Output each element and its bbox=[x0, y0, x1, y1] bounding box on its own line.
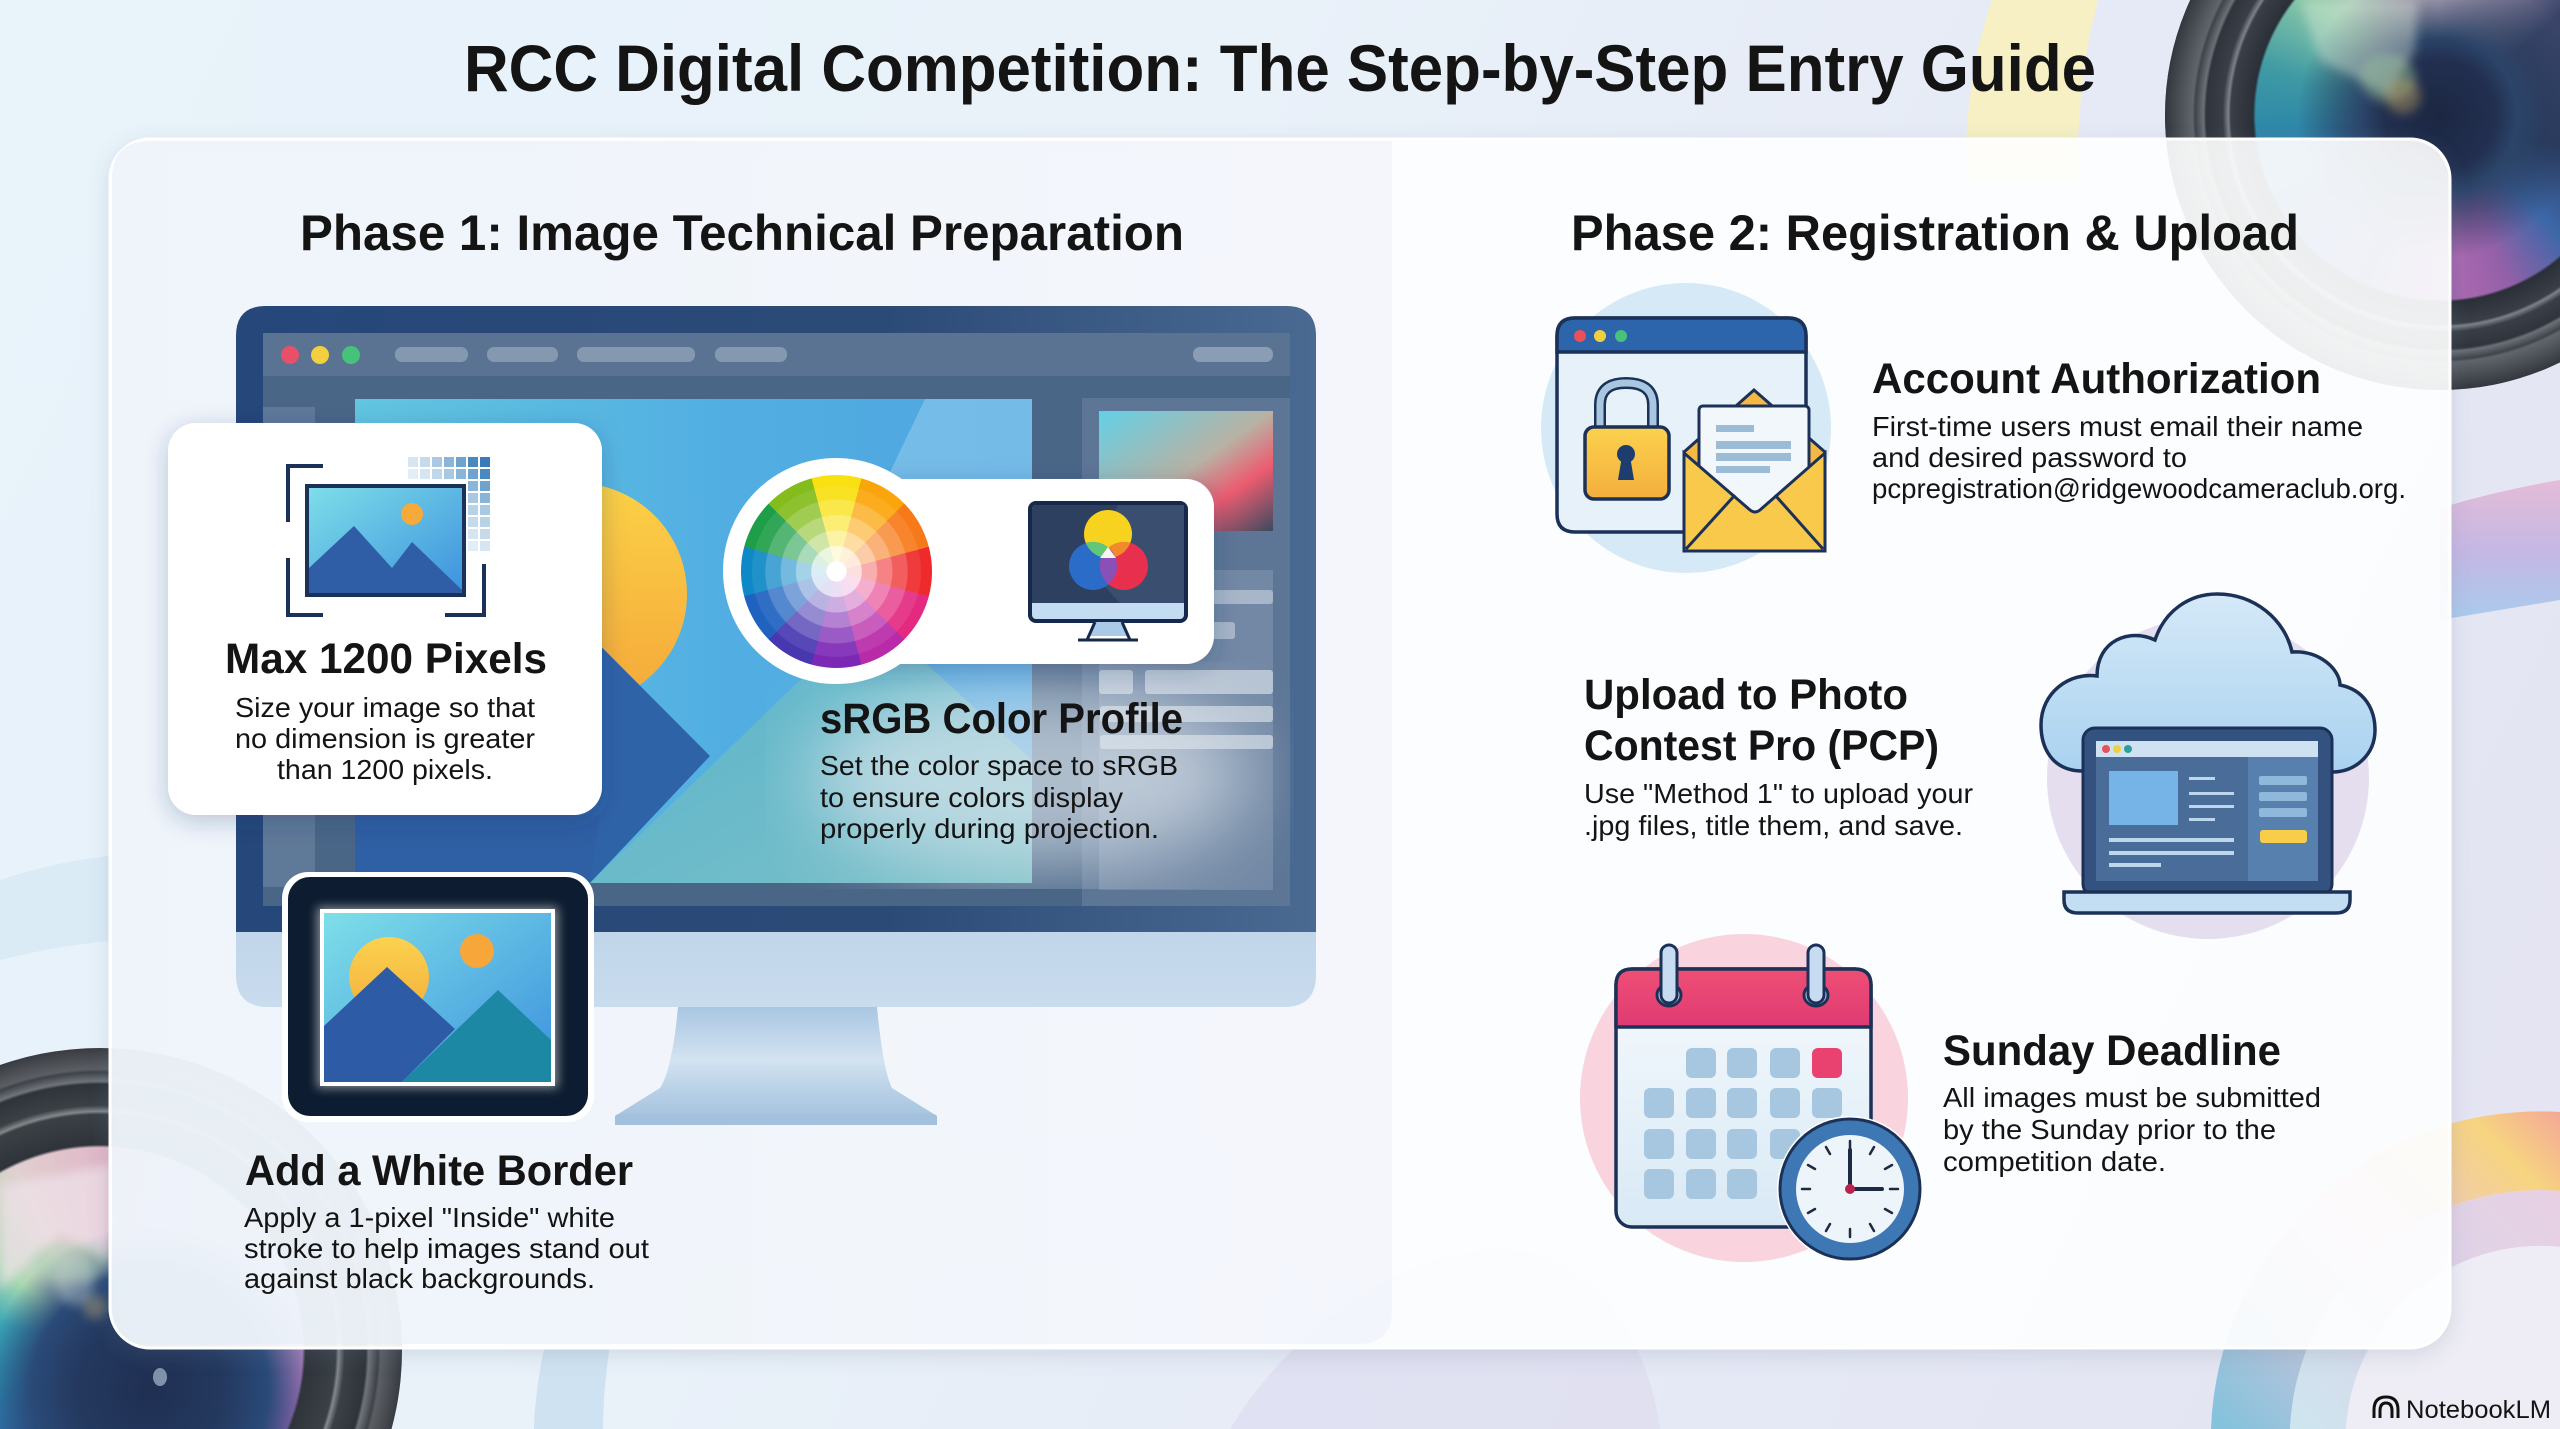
account authorization text block: Account Authorization bbox=[1872, 355, 2321, 403]
card: max 1200 pixels bbox=[168, 423, 602, 815]
icon: account lock and envelope bbox=[1541, 283, 1831, 573]
account authorization text block: pcpregistration@ridgewoodcameraclub.org. bbox=[1872, 473, 2406, 504]
add a white border text block: stroke to help images stand out bbox=[244, 1233, 649, 1264]
upload text block: .jpg files, title them, and save. bbox=[1584, 810, 1963, 841]
phase 2 heading: Phase 2: Registration & Upload bbox=[1571, 205, 2299, 261]
heading: Max 1200 Pixels bbox=[225, 635, 547, 683]
add a white border text block: Add a White Border bbox=[245, 1147, 633, 1195]
sRGB text block: sRGB Color Profile bbox=[820, 695, 1183, 743]
account authorization text block: and desired password to bbox=[1872, 442, 2187, 473]
icon: calendar and clock bbox=[1580, 934, 1923, 1262]
body text: no dimension is greater bbox=[235, 723, 535, 754]
upload text block: Use "Method 1" to upload your bbox=[1584, 778, 1973, 809]
upload text block: Contest Pro (PCP) bbox=[1584, 722, 1939, 770]
body text: Size your image so that bbox=[235, 692, 535, 723]
sRGB text block bbox=[820, 695, 1183, 844]
icon: RGB monitor bbox=[1030, 503, 1186, 640]
add a white border text block: Apply a 1-pixel "Inside" white bbox=[244, 1202, 615, 1233]
color wheel card bbox=[723, 458, 1214, 684]
sRGB text block: properly during projection. bbox=[820, 813, 1159, 844]
add a white border text block bbox=[244, 1147, 649, 1294]
monitor illustration bbox=[236, 306, 1316, 1125]
sunday deadline text block: Sunday Deadline bbox=[1943, 1027, 2281, 1075]
body text: than 1200 pixels. bbox=[277, 754, 493, 785]
title: RCC Digital Competition: The Step-by-Step Entry Guide bbox=[464, 31, 2096, 105]
sunday deadline text block bbox=[1943, 1027, 2321, 1177]
account authorization text block bbox=[1872, 355, 2406, 504]
sunday deadline text block: competition date. bbox=[1943, 1146, 2166, 1177]
icon: framed image with white border bbox=[282, 872, 594, 1122]
account authorization text block: First-time users must email their name bbox=[1872, 411, 2363, 442]
panel: phase 1 image technical preparation bbox=[112, 141, 1392, 1344]
upload text block: Upload to Photo bbox=[1584, 671, 1908, 719]
phase 1 heading: Phase 1: Image Technical Preparation bbox=[300, 205, 1184, 261]
sunday deadline text block: by the Sunday prior to the bbox=[1943, 1114, 2276, 1145]
NotebookLM watermark: NotebookLM bbox=[2406, 1396, 2551, 1424]
icon: cloud and laptop bbox=[2041, 594, 2375, 939]
icon: resize image bbox=[288, 457, 490, 615]
body text bbox=[235, 692, 535, 785]
sRGB text block: to ensure colors display bbox=[820, 782, 1123, 813]
main panel bbox=[110, 139, 2450, 1348]
upload text block bbox=[1584, 671, 1973, 841]
panel: phase 2 registration and upload bbox=[1541, 205, 2406, 1262]
add a white border text block: against black backgrounds. bbox=[244, 1263, 595, 1294]
sRGB text block: Set the color space to sRGB bbox=[820, 750, 1178, 781]
icon: color wheel bbox=[741, 475, 932, 668]
sunday deadline text block: All images must be submitted bbox=[1943, 1082, 2321, 1113]
